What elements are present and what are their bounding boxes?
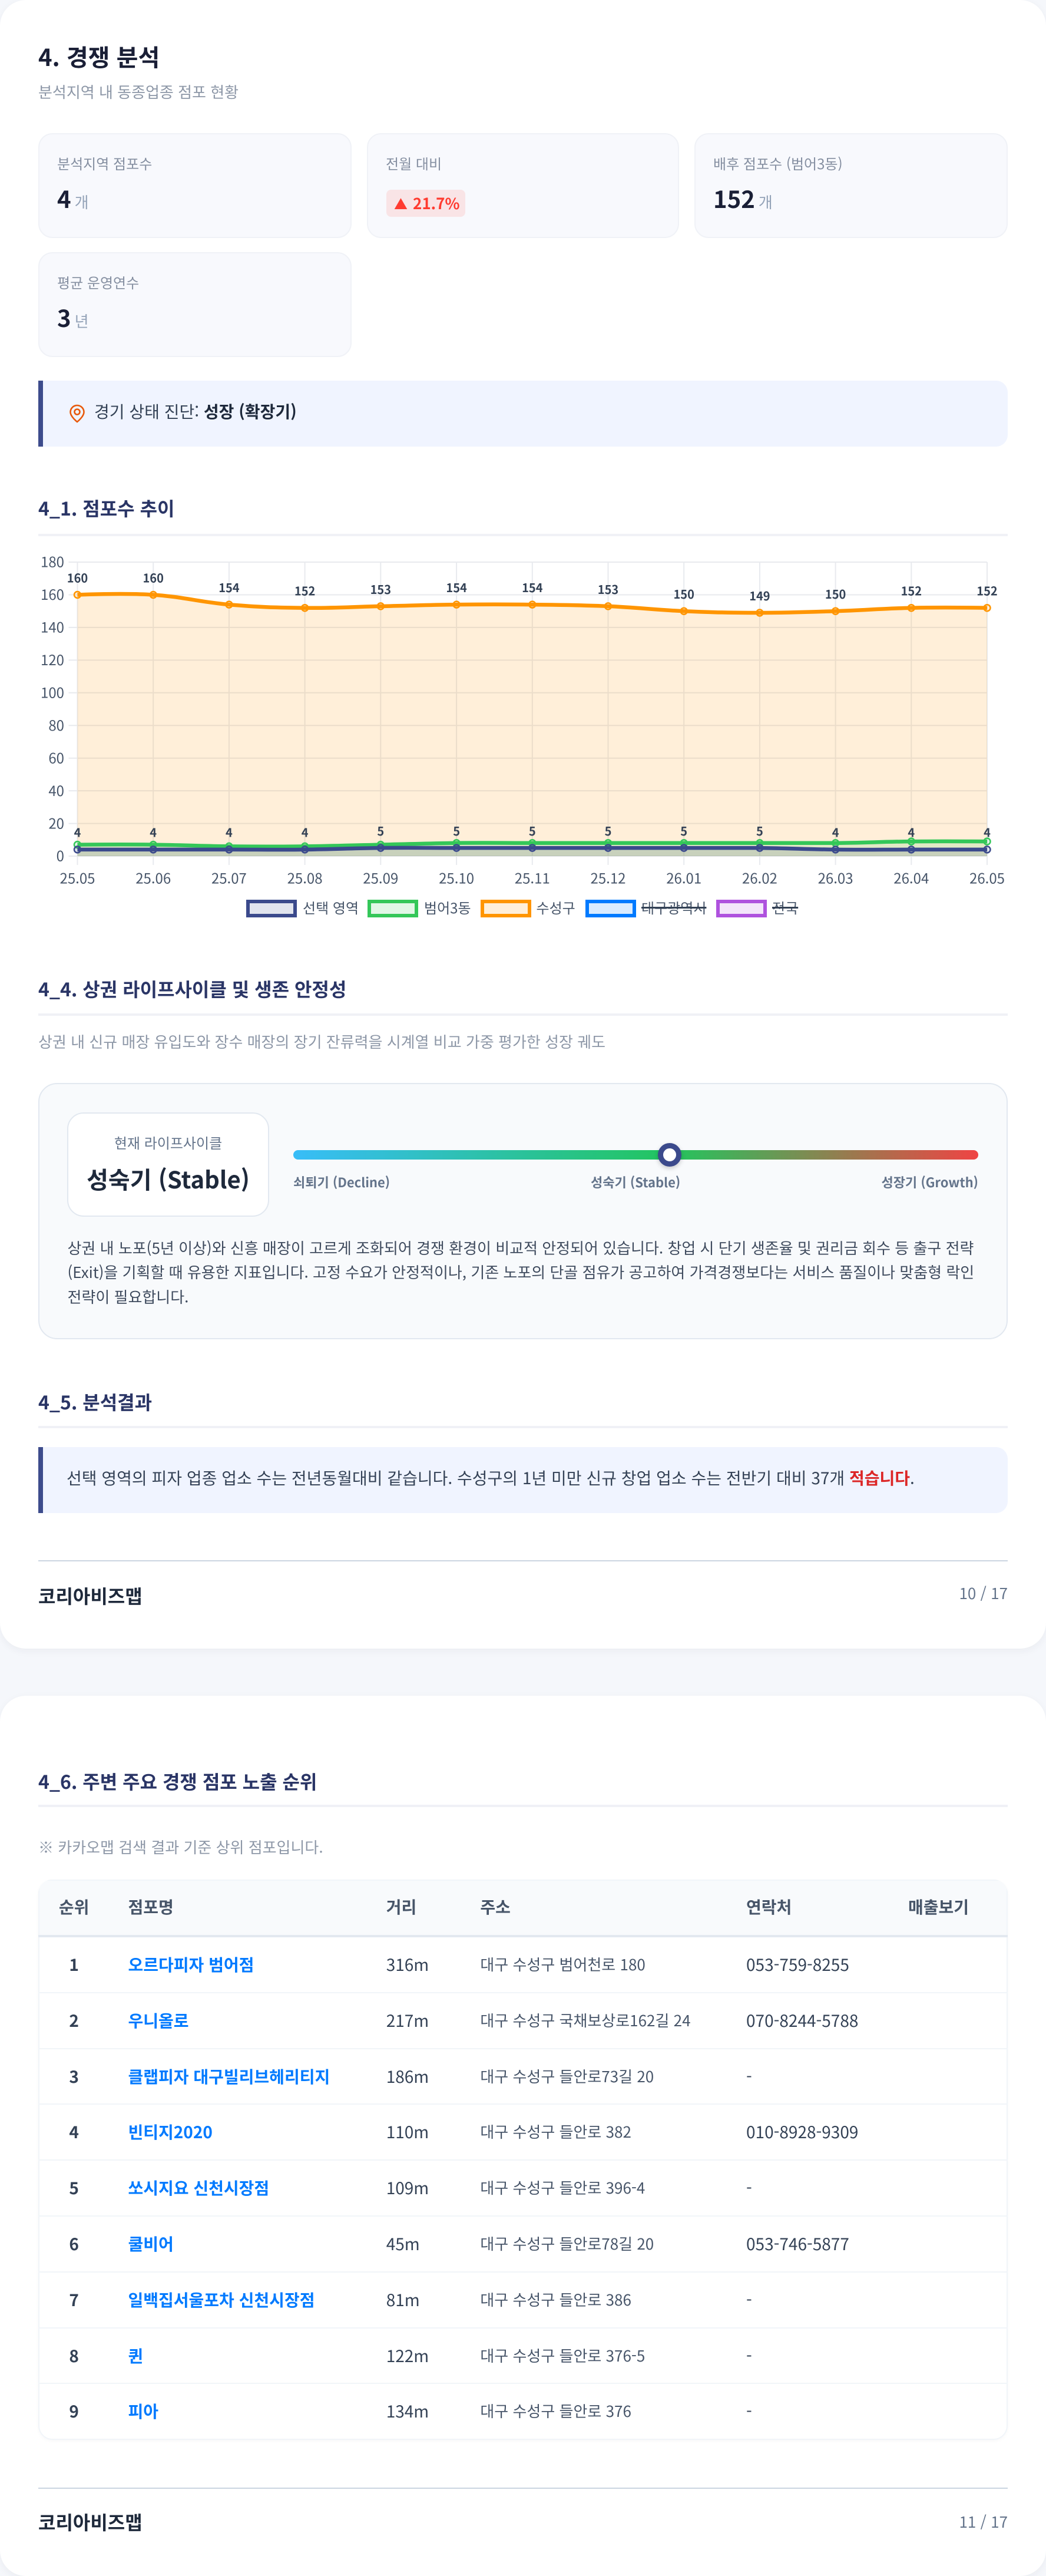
row 2: 우니올로 xyxy=(128,2009,189,2032)
row 4 xyxy=(38,2105,1008,2161)
x axis labels: 25.11 xyxy=(515,867,550,887)
y axis labels: 140 xyxy=(41,616,64,637)
data labels: 선택 영역 values: 4 xyxy=(302,823,309,840)
badge: 21.7 percent up: 21.7% xyxy=(413,192,460,214)
x axis labels: 25.08 xyxy=(287,867,323,887)
row 8 xyxy=(38,2329,1008,2384)
line chart: store count trend xyxy=(41,551,1005,887)
row 2 xyxy=(38,1993,1008,2049)
stat card: month over month xyxy=(367,133,679,238)
data labels: 선택 영역 values: 4 xyxy=(150,823,157,840)
row 8: 122m xyxy=(386,2344,429,2367)
x axis labels: 25.09 xyxy=(363,867,398,887)
data labels: 수성구 values: 149 xyxy=(749,587,770,604)
series: 수성구 xyxy=(74,592,991,856)
stat card: average years xyxy=(38,252,352,357)
data labels: 선택 영역 values: 5 xyxy=(377,822,384,839)
label: stable: 성숙기 (Stable) xyxy=(591,1173,680,1191)
data labels: 수성구 values: 150 xyxy=(825,585,846,602)
badge: 21.7 percent up xyxy=(386,190,465,217)
table: competitor ranking xyxy=(38,1880,1008,2440)
label: decline: 쇠퇴기 (Decline) xyxy=(293,1173,390,1191)
chart legend: 대구광역시 xyxy=(641,897,706,917)
page number: 10 / 17 xyxy=(959,1582,1008,1604)
data labels: 수성구 values: 152 xyxy=(901,582,922,599)
stat card: month over month: 전월 대비 xyxy=(386,153,442,173)
heading: 4_1: 4_1. 점포수 추이 xyxy=(38,494,174,521)
data labels: 선택 영역 values: 4 xyxy=(74,823,81,840)
data labels: 수성구 values: 160 xyxy=(143,569,164,586)
heading: 4_5: 4_5. 분석결과 xyxy=(38,1388,152,1415)
row 5 xyxy=(38,2161,1008,2217)
stat card: store count: 4개 xyxy=(57,181,89,215)
data labels: 수성구 values: 153 xyxy=(370,580,391,597)
y axis labels: 60 xyxy=(48,747,64,767)
title: 4. 경쟁 분석 xyxy=(38,39,160,73)
chart legend: 수성구 xyxy=(536,897,575,917)
row 1: 1 xyxy=(69,1953,79,1976)
series: 범어3동 xyxy=(74,838,991,856)
row 9: 134m xyxy=(386,2399,429,2423)
row 5: - xyxy=(746,2176,752,2199)
row 6: 053-746-5877 xyxy=(746,2232,849,2255)
data labels: 수성구 values: 154 xyxy=(522,579,543,596)
row 3: - xyxy=(746,2065,752,2088)
data labels: 선택 영역 values: 5 xyxy=(756,822,763,839)
x axis labels: 25.06 xyxy=(135,867,171,887)
data labels: 수성구 values: 154 xyxy=(446,579,467,596)
row 2: 대구 수성구 국채보상로162길 24 xyxy=(480,2009,691,2031)
callout: analysis result: 선택 영역의 피자 업종 업소 수는 전년동월대비 같습니다. 수성구의 1년 미만 신규 창업 업소 수는 전반기 대비 37개 적습니다. xyxy=(67,1466,915,1490)
data labels: 선택 영역 values: 4 xyxy=(908,823,915,840)
footer brand: 코리아비즈맵 xyxy=(38,1582,143,1609)
table note: ※ 카카오맵 검색 결과 기준 상위 점포입니다. xyxy=(38,1836,323,1858)
data labels: 선택 영역 values: 4 xyxy=(832,823,839,840)
row 9: 대구 수성구 들안로 376 xyxy=(480,2400,631,2422)
row 6: 45m xyxy=(386,2232,420,2255)
x axis labels: 26.03 xyxy=(818,867,853,887)
table header: 매출보기 xyxy=(908,1895,969,1918)
row 1: 316m xyxy=(386,1953,429,1976)
row 4: 대구 수성구 들안로 382 xyxy=(480,2121,631,2142)
x axis labels: 25.05 xyxy=(60,867,95,887)
y axis labels: 100 xyxy=(41,681,64,702)
page number: 11 / 17 xyxy=(959,2511,1008,2532)
marker: lifecycle position xyxy=(658,1143,681,1167)
table header xyxy=(38,1880,1008,1937)
panel: lifecycle xyxy=(38,1083,1008,1339)
data labels: 수성구 values: 152 xyxy=(294,582,315,599)
card: current lifecycle: 현재 라이프사이클 xyxy=(114,1132,222,1152)
data labels: 수성구 values: 160 xyxy=(67,569,88,586)
data labels: 수성구 values: 153 xyxy=(598,580,618,597)
icon: map pin xyxy=(69,404,85,423)
row 7 xyxy=(38,2273,1008,2329)
row 2: 070-8244-5788 xyxy=(746,2009,858,2032)
lifecycle description: (Exit)을 기획할 때 유용한 지표입니다. 고정 수요가 안정적이나, 기존 노포의 단골 점유가 공고하여 가격경쟁보다는 서비스 품질이나 맞춤형 락인 xyxy=(67,1261,974,1283)
lifecycle description: 상권 내 노포(5년 이상)와 신흥 매장이 고르게 조화되어 경쟁 환경이 비교적 안정되어 있습니다. 창업 시 단기 생존율 및 권리금 회수 등 출구 전략 xyxy=(67,1237,974,1259)
data labels: 선택 영역 values: 5 xyxy=(605,822,611,839)
x axis labels: 26.05 xyxy=(969,867,1005,887)
callout text: 경기 상태 진단: 성장 (확장기) xyxy=(94,399,297,423)
table header: 거리 xyxy=(386,1895,416,1918)
stat card: store count: 분석지역 점포수 xyxy=(57,153,152,173)
series: 선택 영역 xyxy=(74,845,991,856)
panel: page 10 competition analysis xyxy=(0,0,1046,1649)
row 4: 빈티지2020 xyxy=(128,2120,213,2144)
chart legend: 범어3동 xyxy=(424,897,471,917)
row 7: 81m xyxy=(386,2288,420,2311)
row 6: 6 xyxy=(69,2232,79,2255)
y axis labels: 40 xyxy=(48,780,64,800)
data labels: 선택 영역 values: 4 xyxy=(984,823,991,840)
x axis labels: 26.04 xyxy=(893,867,929,887)
row 7: - xyxy=(746,2288,752,2311)
stat card: hinterland store count: 배후 점포수 (범어3동) xyxy=(713,153,843,173)
row 3: 3 xyxy=(69,2065,79,2088)
stat card: average years: 3년 xyxy=(57,300,89,334)
badge: 21.7 percent up: ▲ xyxy=(394,193,408,213)
row 2: 217m xyxy=(386,2009,429,2032)
heading: 4_4: 4_4. 상권 라이프사이클 및 생존 안정성 xyxy=(38,975,346,1002)
y axis labels: 80 xyxy=(48,714,64,735)
data labels: 선택 영역 values xyxy=(74,822,991,840)
table header: 연락처 xyxy=(746,1895,792,1918)
y axis labels: 160 xyxy=(41,583,64,604)
data labels: 선택 영역 values: 4 xyxy=(226,823,233,840)
row 6 xyxy=(38,2217,1008,2273)
callout: business condition diagnosis xyxy=(38,381,1008,447)
y axis labels xyxy=(41,551,64,866)
data labels: 수성구 values: 150 xyxy=(673,585,694,602)
footer brand: 코리아비즈맵 xyxy=(38,2508,143,2535)
row 5: 109m xyxy=(386,2176,429,2199)
x axis labels: 26.01 xyxy=(666,867,701,887)
data labels: 수성구 values: 152 xyxy=(977,582,998,599)
stat card: average years: 평균 운영연수 xyxy=(57,272,139,292)
row 8: - xyxy=(746,2344,752,2367)
chart legend: 선택 영역 xyxy=(303,897,359,917)
data labels: 선택 영역 values: 5 xyxy=(453,822,460,839)
label: growth: 성장기 (Growth) xyxy=(881,1173,978,1191)
subtitle: 분석지역 내 동종업종 점포 현황 xyxy=(38,80,239,103)
card: current lifecycle: 성숙기 (Stable) xyxy=(87,1161,250,1195)
callout: analysis result xyxy=(38,1447,1008,1513)
row 6: 쿨비어 xyxy=(128,2232,174,2255)
heading: 4_6: 4_6. 주변 주요 경쟁 점포 노출 순위 xyxy=(38,1768,317,1795)
data labels: 수성구 values xyxy=(67,569,998,604)
stat card: hinterland store count: 152개 xyxy=(713,181,773,215)
row 3: 대구 수성구 들안로73길 20 xyxy=(480,2065,654,2087)
data labels: 수성구 values: 154 xyxy=(219,579,240,596)
table header: 순위 xyxy=(59,1895,89,1918)
y axis labels: 180 xyxy=(41,551,64,572)
lifecycle description: 전략이 필요합니다. xyxy=(67,1286,188,1307)
table header: 주소 xyxy=(480,1895,511,1918)
card: current lifecycle xyxy=(67,1112,269,1217)
row 5: 대구 수성구 들안로 396-4 xyxy=(480,2177,645,2198)
row 4: 4 xyxy=(69,2120,79,2144)
x axis labels: 26.02 xyxy=(742,867,777,887)
row 5: 쏘시지요 신천시장점 xyxy=(128,2176,269,2199)
row 8: 대구 수성구 들안로 376-5 xyxy=(480,2344,645,2366)
data labels: 선택 영역 values: 5 xyxy=(680,822,687,839)
row 9: 9 xyxy=(69,2399,79,2423)
row 1 xyxy=(38,1937,1008,1993)
table header: 점포명 xyxy=(128,1895,174,1918)
chart legend xyxy=(246,897,799,917)
stat card: store count xyxy=(38,133,352,238)
row 1: 오르다피자 범어점 xyxy=(128,1953,254,1976)
row 3: 클랩피자 대구빌리브헤리티지 xyxy=(128,2065,330,2088)
row 1: 대구 수성구 범어천로 180 xyxy=(480,1953,646,1975)
row 7: 7 xyxy=(69,2288,79,2311)
row 9: - xyxy=(746,2399,752,2423)
gradient lifecycle bar xyxy=(293,1150,978,1160)
row 3: 186m xyxy=(386,2065,429,2088)
row 6: 대구 수성구 들안로78길 20 xyxy=(480,2232,654,2254)
row 8: 8 xyxy=(69,2344,79,2367)
row 4: 010-8928-9309 xyxy=(746,2120,858,2144)
y axis labels: 120 xyxy=(41,649,64,669)
row 9 xyxy=(69,2399,752,2423)
section description: 상권 내 신규 매장 유입도와 장수 매장의 장기 잔류력을 시계열 비교 가중 평가한 성장 궤도 xyxy=(38,1030,605,1052)
x axis labels: 25.10 xyxy=(439,867,474,887)
lifecycle description xyxy=(67,1237,974,1307)
stat card: hinterland store count xyxy=(694,133,1008,238)
row 2: 2 xyxy=(69,2009,79,2032)
row 8: 퀸 xyxy=(128,2344,143,2367)
row 1: 053-759-8255 xyxy=(746,1953,849,1976)
row 7: 대구 수성구 들안로 386 xyxy=(480,2288,631,2310)
y axis labels: 0 xyxy=(57,845,64,866)
row 5: 5 xyxy=(69,2176,79,2199)
row 3 xyxy=(38,2049,1008,2105)
row 9: 피아 xyxy=(128,2399,158,2423)
y axis labels: 20 xyxy=(48,812,64,833)
panel: page 11 nearby competitors xyxy=(0,1696,1046,2576)
x axis labels: 25.12 xyxy=(591,867,625,887)
row 7: 일백집서울포차 신천시장점 xyxy=(128,2288,315,2311)
x axis labels: 25.07 xyxy=(211,867,247,887)
row 4: 110m xyxy=(386,2120,429,2144)
data labels: 선택 영역 values: 5 xyxy=(529,822,536,839)
x axis labels xyxy=(60,867,1005,887)
chart legend: 전국 xyxy=(772,897,798,917)
